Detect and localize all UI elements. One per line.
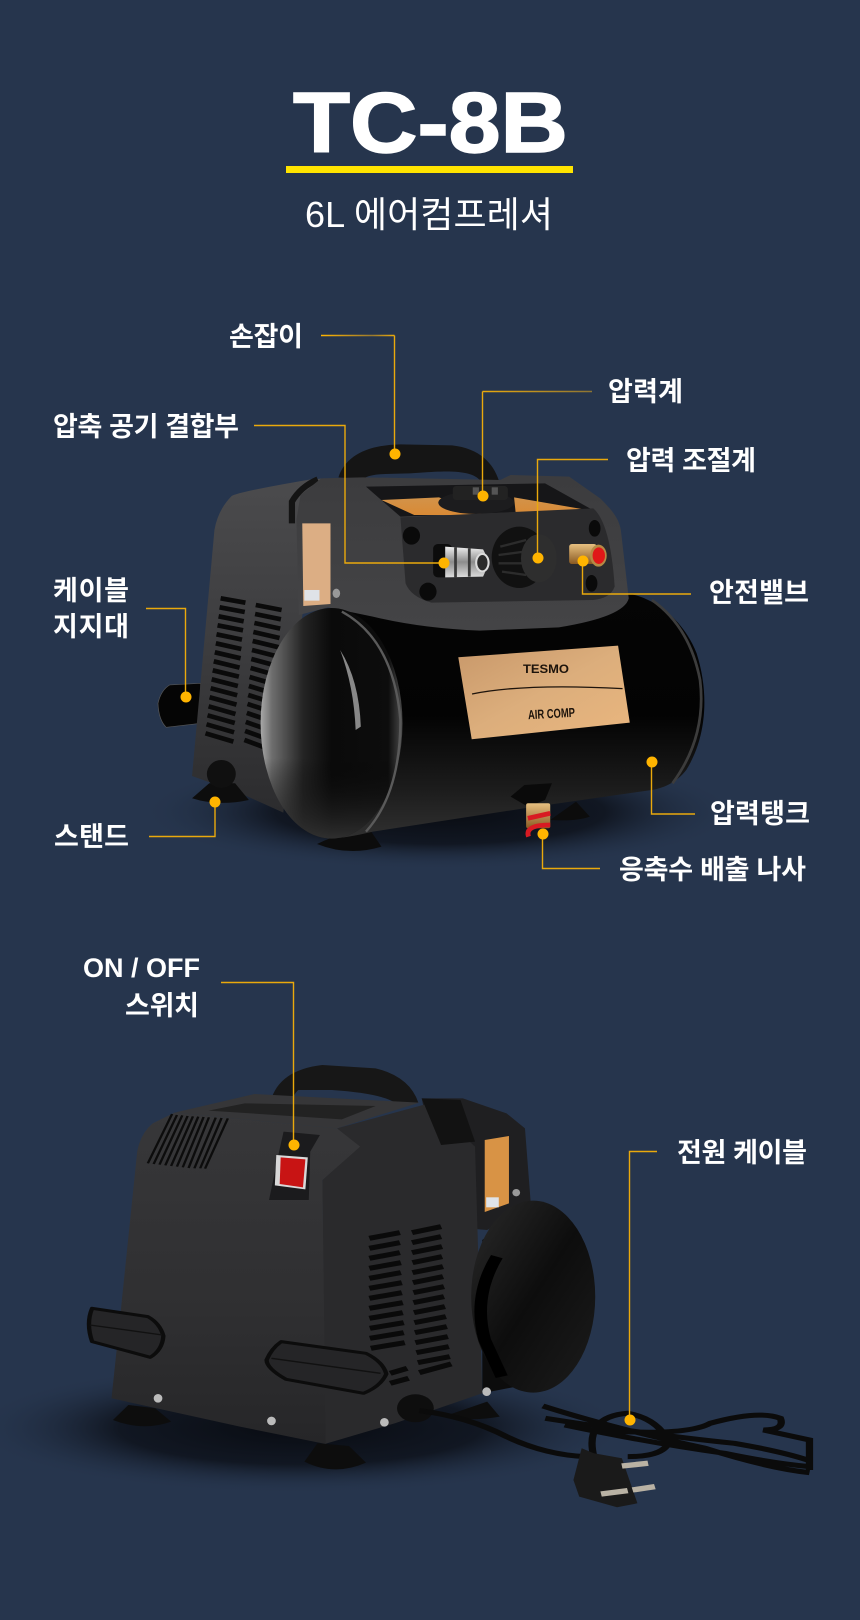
callout: 손잡이 — [229, 322, 400, 460]
top surface — [175, 1094, 419, 1128]
ground shadow: bottom product — [0, 1362, 630, 1494]
cable support bracket — [158, 683, 201, 727]
product: front view compressor — [158, 444, 704, 851]
tank end crease — [481, 1257, 502, 1377]
top recess — [208, 1103, 376, 1119]
top recess — [366, 483, 592, 517]
end cap lower sheen — [261, 608, 402, 839]
side face — [322, 1103, 482, 1444]
panel holes — [403, 520, 601, 601]
tank end — [471, 1201, 595, 1393]
tank neck — [482, 1213, 516, 1393]
end cap rim — [342, 612, 400, 832]
air coupler fitting — [433, 544, 489, 577]
back face — [112, 1113, 360, 1444]
foot left — [113, 1405, 171, 1426]
callout: 압력계: 압력계 — [608, 377, 683, 407]
top vent ribs — [148, 1114, 228, 1169]
pressure regulator knob — [492, 527, 557, 588]
product: rear view compressor — [89, 1065, 809, 1507]
callout: 스탠드 — [54, 796, 220, 852]
front foot — [317, 831, 381, 851]
drain valve — [511, 783, 552, 837]
title underline — [286, 166, 573, 173]
callout: 압축 공기 결합부 — [53, 412, 450, 568]
callout: ON / OFF 스위치 — [83, 953, 300, 1150]
carry handle — [338, 444, 499, 481]
side vent slots — [369, 1227, 451, 1383]
bolt — [333, 589, 340, 598]
callout: 압력계 — [478, 377, 683, 502]
plug — [573, 1448, 655, 1507]
top labels — [381, 497, 584, 515]
callout: 손잡이: 손잡이 — [229, 322, 303, 352]
tank label text: AIR COMP: AIR COMP — [528, 705, 576, 722]
callout: 압력탱크 — [646, 756, 810, 829]
barcode — [304, 590, 319, 601]
rear housing — [192, 478, 325, 813]
pad grooves — [90, 1325, 381, 1373]
callout: 압축 공기 결합부: 압축 공기 결합부 — [53, 412, 239, 442]
end cap highlight — [340, 650, 361, 730]
bolt — [512, 1189, 520, 1196]
seam — [292, 479, 318, 523]
left grip pad — [89, 1308, 163, 1357]
screws — [154, 1387, 491, 1427]
callout: 응축수 배출 나사 — [538, 828, 806, 885]
callout: 케이블 지지대: 케이블 — [53, 576, 129, 606]
tank label text: TESMO: TESMO — [523, 662, 569, 676]
cable gland — [207, 760, 236, 788]
tank right rim — [652, 600, 701, 783]
callout: 압력탱크: 압력탱크 — [710, 799, 810, 829]
power cable coil — [419, 1406, 809, 1473]
callout: ON / OFF 스위치: ON / OFF — [83, 953, 200, 983]
right grip pad — [267, 1342, 386, 1393]
callout: 안전밸브: 안전밸브 — [709, 578, 809, 608]
callout: 응축수 배출 나사: 응축수 배출 나사 — [619, 855, 806, 885]
callout: 스탠드: 스탠드 — [54, 822, 129, 852]
pressure tank body — [332, 593, 704, 838]
foot center — [304, 1443, 366, 1469]
control panel — [400, 508, 615, 603]
ground shadow: top product — [140, 754, 740, 870]
callout: ON / OFF 스위치: 스위치 — [125, 991, 199, 1021]
callout: 안전밸브 — [578, 556, 809, 608]
safety valve — [569, 544, 607, 567]
callout: 케이블 지지대 — [53, 576, 192, 702]
foot rear — [444, 1402, 500, 1419]
housing vent slots — [205, 598, 282, 750]
callout: 압력 조절계 — [532, 446, 756, 564]
side channel — [422, 1098, 475, 1145]
barcode — [486, 1197, 499, 1207]
stand foot — [192, 783, 249, 803]
callout: 전원 케이블 — [624, 1138, 807, 1426]
tank label — [458, 646, 630, 739]
rocker switch housing — [269, 1132, 320, 1200]
side label — [485, 1136, 509, 1212]
rear section — [422, 1098, 531, 1230]
label swoosh — [472, 687, 623, 694]
carry handle — [270, 1065, 418, 1103]
callout: 압력 조절계: 압력 조절계 — [626, 446, 756, 476]
rocker switch — [275, 1155, 308, 1189]
callout: 케이블 지지대: 지지대 — [53, 612, 129, 642]
callout: 전원 케이블: 전원 케이블 — [677, 1138, 807, 1168]
tank end cap — [261, 608, 402, 839]
pressure gauge base — [438, 486, 514, 514]
cable gland — [397, 1394, 434, 1422]
title: TC-8B: TC-8B — [293, 76, 568, 171]
subtitle: 6L 에어컴프레셔 — [305, 194, 553, 235]
side spec label — [302, 523, 331, 606]
top shell — [296, 475, 629, 631]
rear foot — [550, 802, 590, 820]
